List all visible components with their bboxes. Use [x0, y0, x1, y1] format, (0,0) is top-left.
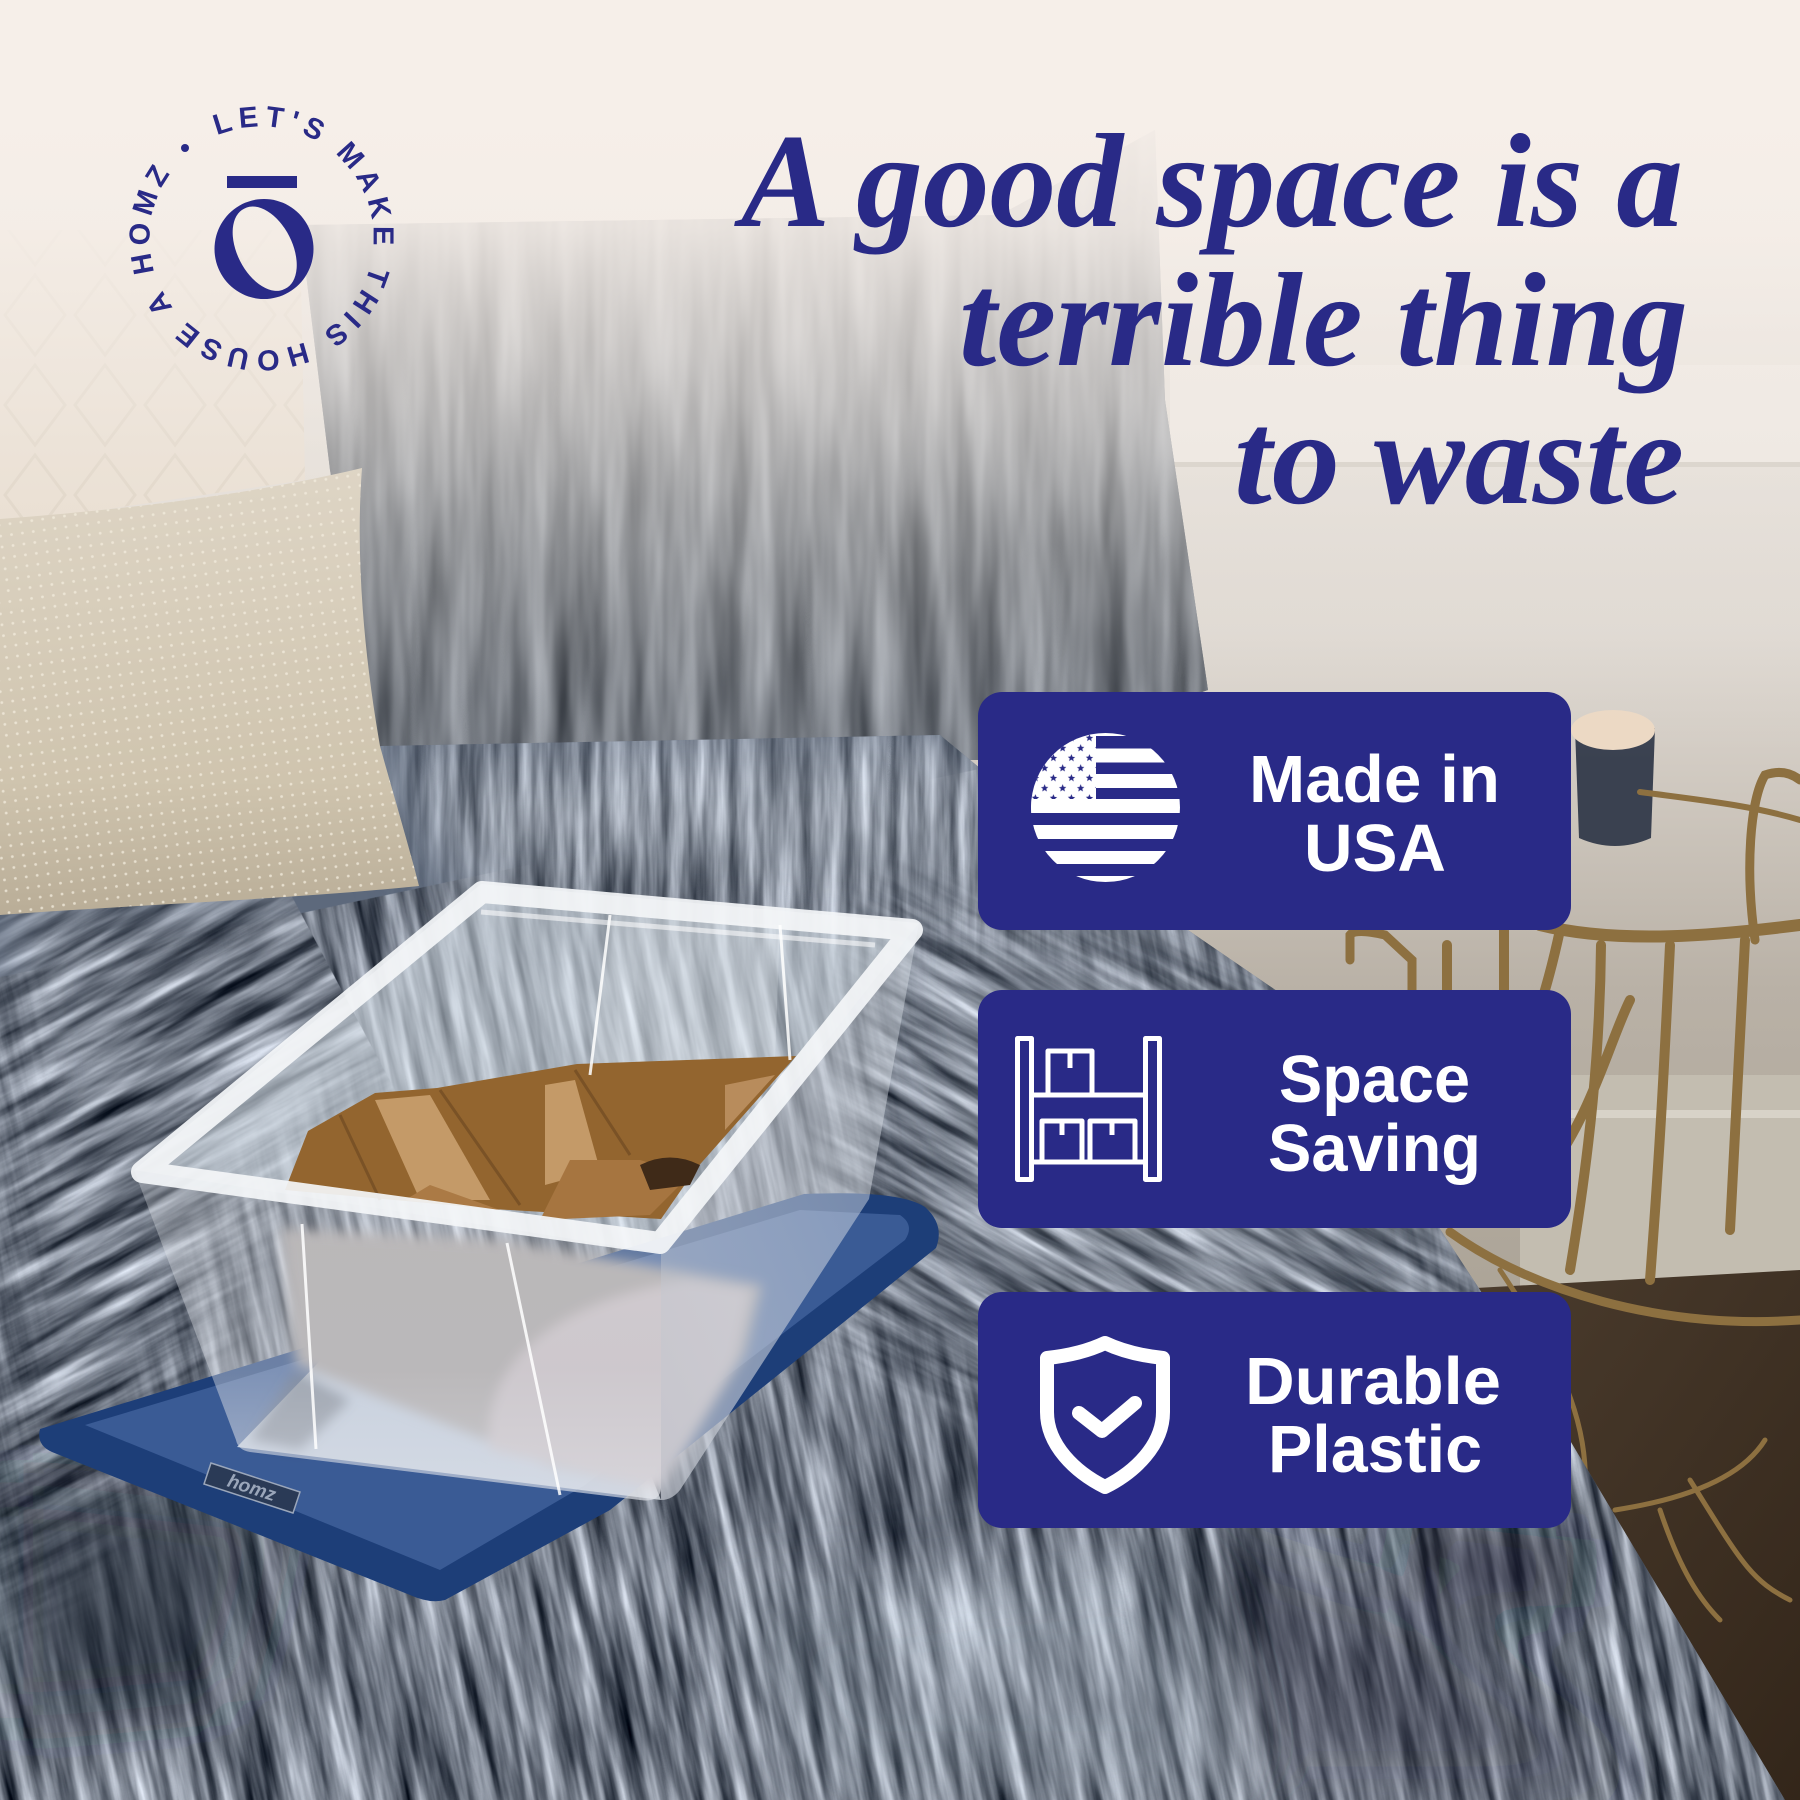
clear plastic storage box with suede shoes: [134, 884, 919, 1500]
logo ring text: LET'S MAKE THIS HOUSE A HOMZ: [129, 106, 394, 371]
headline: A good space is a: [734, 107, 1683, 255]
back beige pillow: [0, 230, 305, 525]
shoes seen through the frosted front: [250, 1228, 762, 1490]
label: USA: [1304, 811, 1446, 886]
box rim: [142, 892, 912, 1243]
icon: shelf with boxes: [1018, 1038, 1160, 1180]
logo: circular Homz badge: [129, 106, 394, 371]
headline: [734, 107, 1688, 532]
suede shoes visible above the rim: [285, 1056, 796, 1220]
label: [1268, 1042, 1481, 1186]
soft cream fade over the upper photo: [0, 0, 1800, 760]
label: Plastic: [1268, 1412, 1482, 1487]
label: Saving: [1268, 1111, 1481, 1186]
blue lid under the box: [39, 1193, 939, 1601]
dark and light folds: [0, 750, 1650, 1790]
label: Durable: [1245, 1344, 1501, 1419]
gold side table: [1350, 772, 1800, 1620]
crushed velvet bedspread: [0, 700, 1800, 1800]
label: [1249, 742, 1500, 886]
box front face: [134, 1170, 661, 1500]
panel: Durable Plastic: [978, 1292, 1571, 1528]
lid logo plate: [204, 1463, 300, 1513]
front dotted cushion: [0, 468, 419, 915]
panel: Made in USA: [978, 692, 1571, 930]
candle on side table: [1571, 710, 1655, 846]
large grey pillow: [306, 160, 1208, 760]
icon: shield with check: [1047, 1343, 1163, 1487]
box right face: [661, 923, 919, 1500]
headline: terrible thing: [959, 246, 1688, 394]
label: [1245, 1344, 1501, 1487]
logo letter o: [215, 199, 314, 299]
box interior: [134, 884, 919, 1253]
panel: Space Saving: [978, 990, 1571, 1228]
lid logo plate: homz: [225, 1471, 279, 1506]
box floor reflection: [237, 1340, 661, 1500]
label: Space: [1279, 1042, 1470, 1117]
logo ring dot: [181, 144, 189, 152]
back panel: [590, 915, 780, 1075]
box edge lines: [302, 915, 790, 1495]
wall moulding and baseboard: [1170, 365, 1800, 1290]
label: Made in: [1249, 742, 1500, 817]
icon: American flag circle: [1031, 733, 1181, 884]
headline: to waste: [1234, 384, 1684, 532]
logo macron bar: [227, 176, 297, 188]
floor: [1440, 1270, 1800, 1800]
